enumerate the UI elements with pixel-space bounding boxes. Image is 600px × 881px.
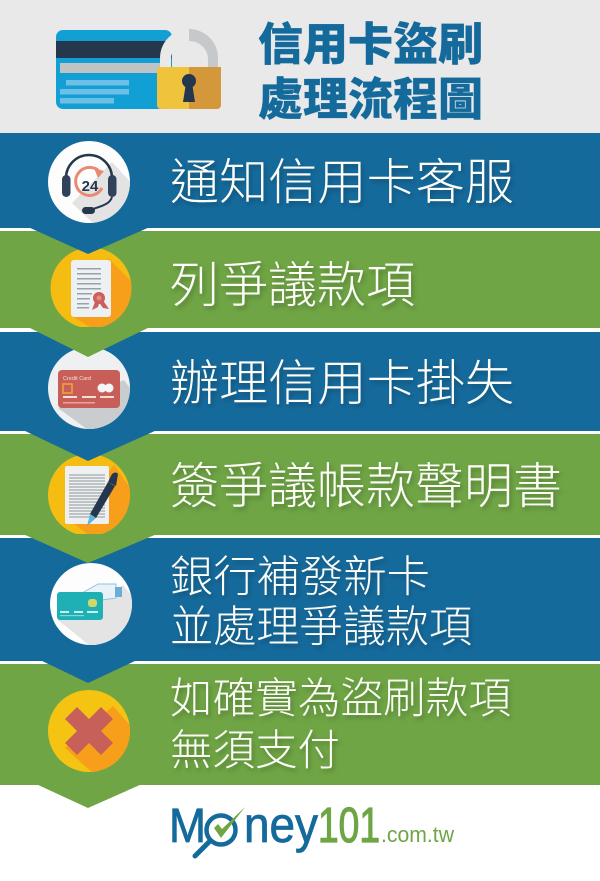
logo: Money101.com.tw	[169, 797, 454, 856]
title: 信用卡盜刷	[258, 19, 483, 70]
header background	[0, 0, 600, 133]
icon: red cross	[48, 690, 135, 775]
icon: certificate document	[50, 248, 135, 330]
icon: headset 24h	[48, 141, 135, 225]
logo: Money101.com.tw: .com.tw	[381, 822, 454, 847]
step 6 label: 如確實為盜刷款項	[170, 675, 511, 723]
arrow: step 3	[23, 430, 157, 461]
step 1 label: 通知信用卡客服	[170, 156, 514, 210]
title: 處理流程圖	[258, 74, 483, 125]
step 6 label	[170, 675, 511, 775]
logo: Money101.com.tw: 101	[318, 799, 380, 853]
band: step 4	[0, 434, 600, 535]
icon: document with pen	[48, 456, 130, 534]
step 5 label: 銀行補發新卡	[170, 554, 430, 602]
band: step 1	[0, 133, 600, 228]
icon: headset 24h: 24	[82, 178, 99, 195]
band: step 5	[0, 538, 600, 661]
band: step 2	[0, 231, 600, 328]
step 3 label: 辦理信用卡掛失	[170, 357, 514, 411]
logo: Money101.com.tw: ney	[244, 797, 318, 853]
icon: hand holding teal card	[50, 563, 135, 650]
logo: Money101.com.tw: M	[169, 800, 206, 853]
icon: credit card with padlock	[56, 29, 221, 109]
arrow: step 2	[28, 327, 150, 357]
step 4 label: 簽爭議帳款聲明書	[170, 460, 562, 514]
arrow: step 6	[36, 784, 142, 808]
step 6 label: 無須支付	[170, 727, 340, 775]
step 5 label: 並處理爭議款項	[170, 604, 472, 652]
step 2 label: 列爭議款項	[170, 259, 415, 313]
step 5 label	[170, 554, 472, 652]
band: step 3	[0, 332, 600, 431]
icon: red credit card	[48, 350, 130, 429]
band: step 6	[0, 664, 600, 785]
icon: red credit card: Credit Card	[63, 376, 91, 382]
arrow: step 5	[40, 660, 137, 683]
arrow: step 1	[28, 227, 150, 254]
arrow: step 4	[23, 534, 157, 563]
title	[258, 19, 483, 125]
